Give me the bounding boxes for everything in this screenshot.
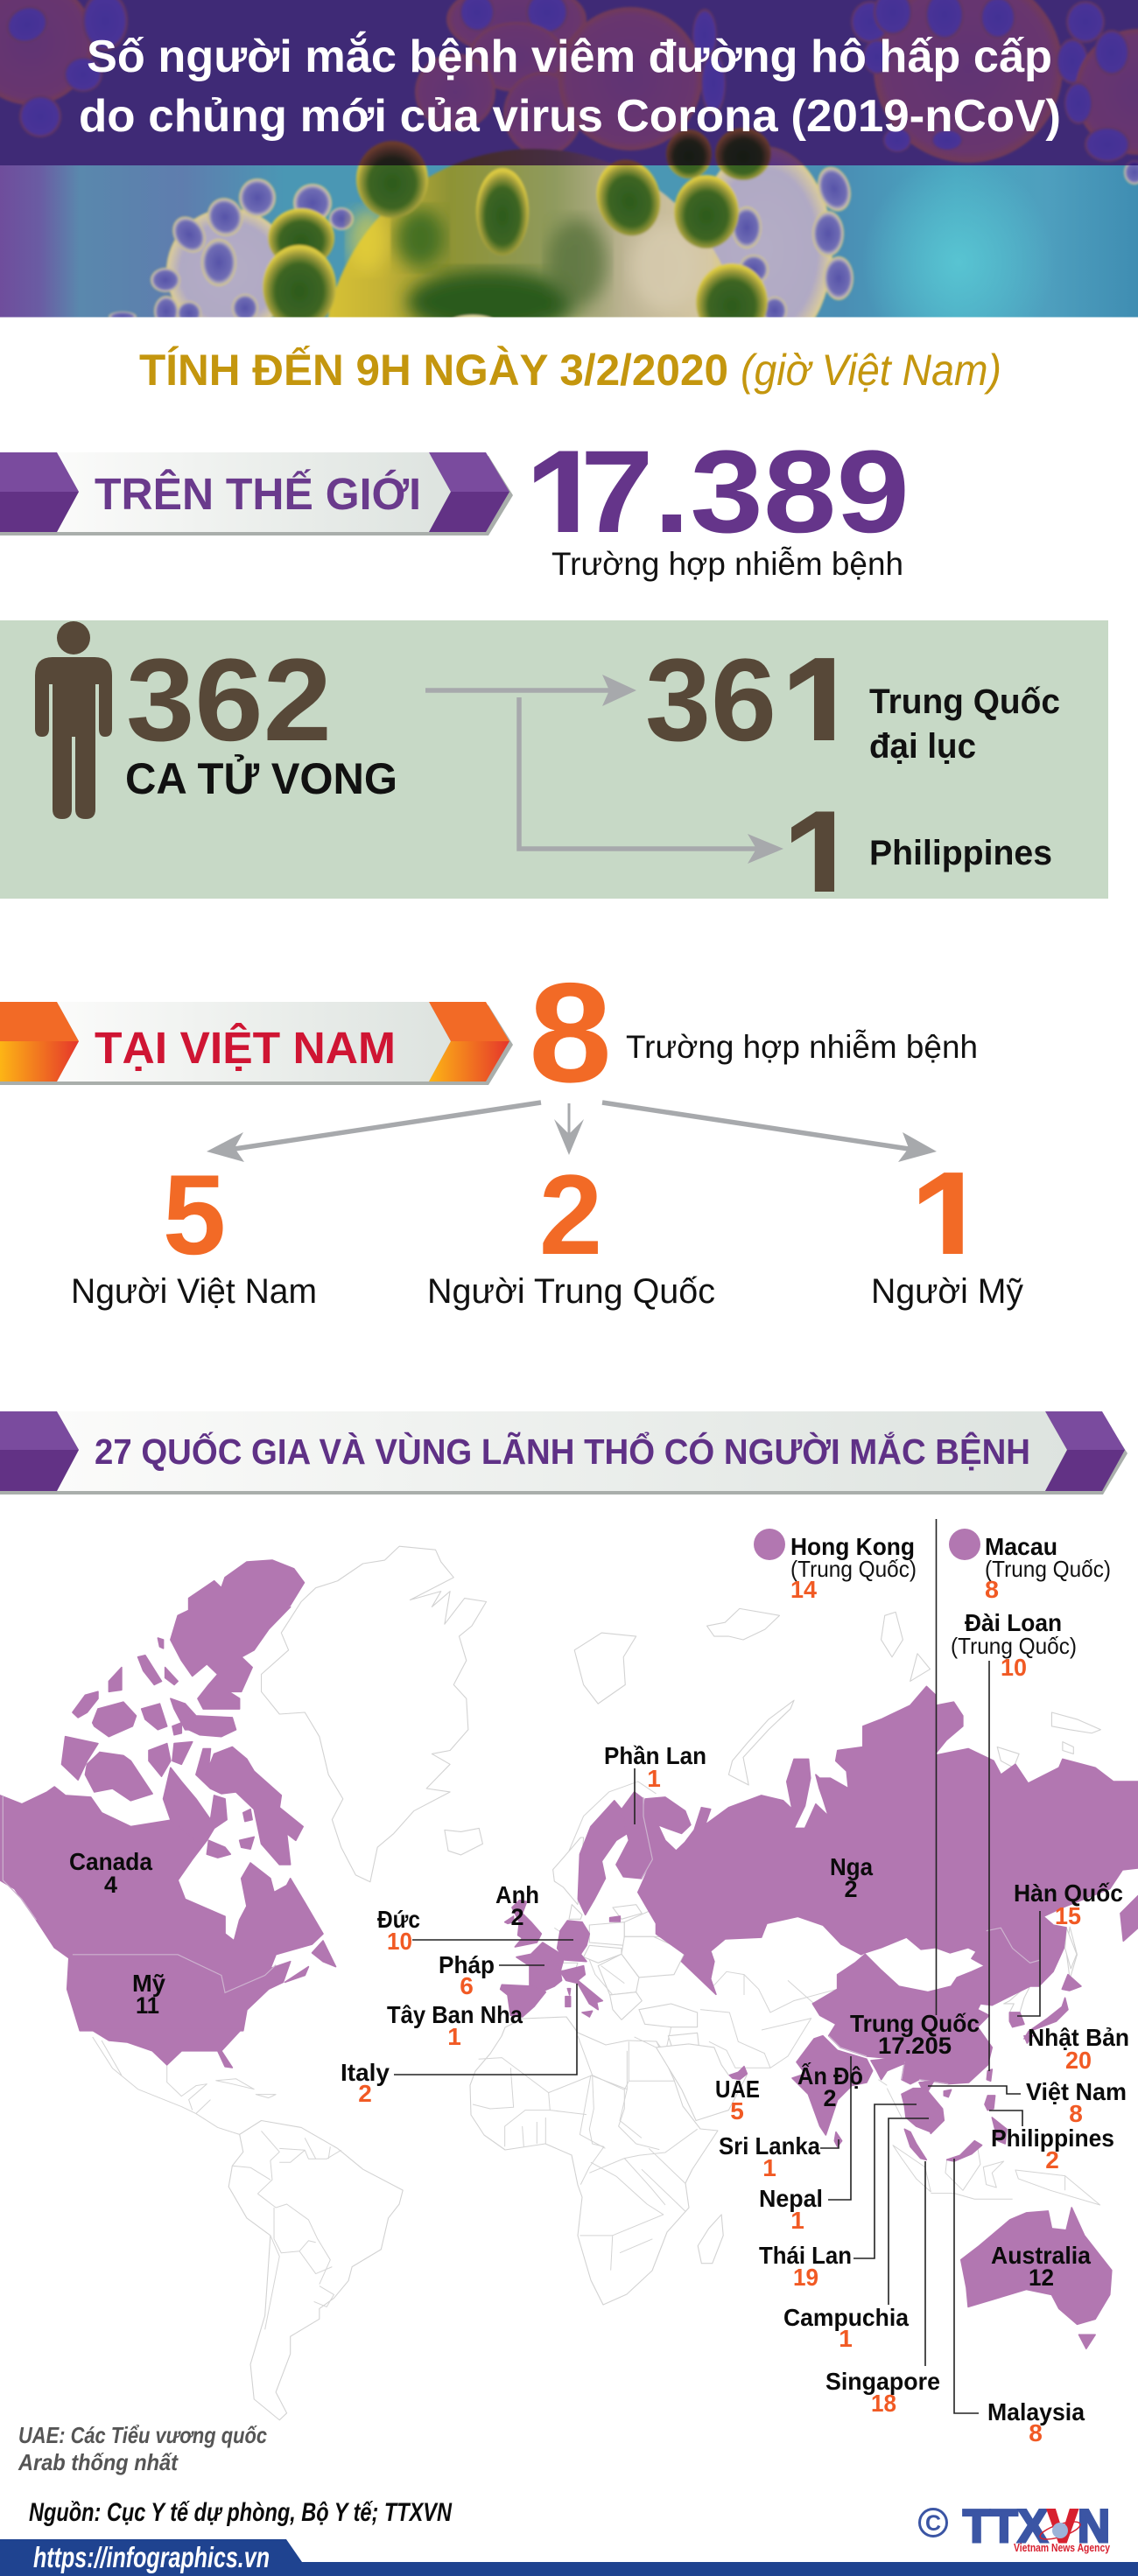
label: Pháp: Pháp [439,1951,495,1978]
label: Mỹ: 11 [136,1992,159,2019]
label: Hàn Quốc: 15 [1055,1902,1081,1929]
label: Đài Loan: Đài Loan [965,1609,1062,1636]
deaths in Philippines [782,781,1052,940]
label: Canada [69,1848,152,1898]
label: Trung Quốc [850,2010,980,2059]
logo: TTXVN [919,2501,1111,2554]
arrows to breakdown [425,675,783,864]
label: Sri Lanka: 1 [762,2154,776,2181]
label: Philippines: Philippines [991,2124,1114,2152]
label: Anh: 2 [510,1904,524,1930]
stat: American [871,1142,1023,1311]
deaths in mainland China [648,658,1059,764]
label: Tây Ban Nha [387,2001,523,2050]
banner: countries: 27 QUỐC GIA VÀ VÙNG LÃNH THỔ CÓ NGƯỜI MẮC BỆNH [95,1431,1030,1472]
back lavender virus [712,146,833,317]
label: Macau: (Trung Quốc) [985,1556,1111,1582]
title [79,31,1061,142]
label: UAE: UAE [715,2076,760,2103]
label: Đài Loan: 10 [1001,1654,1027,1681]
label: Macau: 8 [985,1576,999,1603]
top-left virus [0,0,94,105]
banner: countries [0,1411,1127,1494]
label: Hong Kong: 14 [790,1576,817,1603]
deaths total: CA TỬ VONG [125,753,397,803]
label: Macau [949,1529,1111,1603]
label: Đài Loan: (Trung Quốc) [951,1633,1077,1659]
main sphere lobes [356,141,428,218]
stat: Vietnamese: 5 [163,1151,226,1278]
label: Tây Ban Nha: Tây Ban Nha [387,2001,523,2028]
map: affected countries [0,1560,1138,2348]
label: Hong Kong: (Trung Quốc) [790,1556,917,1582]
label: Macau: Macau [985,1533,1057,1560]
stat: American: 1 [910,1142,989,1302]
label: Nhật Bản [1028,2024,1129,2074]
label: Nepal: 1 [790,2207,804,2234]
label: Trung Quốc: Trung Quốc [850,2010,980,2037]
deaths in mainland China: 36 [645,635,776,766]
Vietnam total cases: 8 [529,954,612,1112]
label: Malaysia: Malaysia [987,2398,1085,2426]
main sphere [327,148,723,317]
arrows: Vietnam breakdown [207,1102,937,1162]
world total cases: Trường hợp nhiễm bệnh [551,546,903,582]
banner: Vietnam: TẠI VIỆT NAM [95,1022,396,1073]
date line: (giờ Việt Nam) [741,346,1001,395]
note: UAE definition: Arab thống nhất [18,2449,179,2475]
top-right large virus [874,0,1063,163]
deaths total [125,635,397,803]
icon: person [35,621,112,819]
deaths in mainland China: Trung Quốc [869,682,1060,721]
band base tone [0,0,1138,165]
label: Việt Nam [1026,2078,1127,2127]
label: Anh [495,1881,539,1930]
label: Singapore: 18 [871,2390,896,2417]
Russia and Scandinavia [578,1686,1138,1994]
label: Mỹ: Mỹ [132,1970,165,1997]
title: do chủng mới của virus Corona (2019-nCoV) [79,91,1061,142]
label: Nga [830,1853,873,1902]
label: Canada: Canada [69,1848,152,1875]
label: Campuchia: Campuchia [783,2304,909,2331]
label: Italy: 2 [358,2080,372,2107]
world total cases [524,420,910,582]
label: Philippines: 2 [1045,2146,1059,2174]
label: Canada: 4 [104,1872,117,1898]
map: outlined countries [93,1546,1100,2420]
label: Malaysia: 8 [1029,2419,1043,2446]
label: Campuchia [783,2304,909,2352]
label: Việt Nam: Việt Nam [1026,2078,1127,2105]
label: Thái Lan: Thái Lan [759,2242,852,2269]
copyright mark: C [925,2511,941,2536]
North America [0,1560,336,2031]
purple title band [0,0,1138,165]
label: Trung Quốc: 17.205 [878,2033,952,2059]
copyright mark [919,2510,947,2536]
label: Nhật Bản: 20 [1065,2047,1092,2074]
label: Hàn Quốc [1014,1880,1123,1929]
stat: Vietnamese [71,1151,317,1311]
source: Nguồn: Cục Y tế dự phòng, Bộ Y tế; TTXVN [29,2498,453,2527]
deaths in Philippines: Philippines [869,834,1052,872]
footer bar [0,2539,1138,2576]
deaths in mainland China: đại lục [869,727,976,766]
date line: TÍNH ĐẾN 9H NGÀY 3/2/2020 [139,346,728,395]
label: Sri Lanka [719,2132,820,2181]
label: Philippines [991,2124,1114,2174]
date line [139,346,1001,395]
label: Tây Ban Nha: 1 [447,2023,461,2050]
label: Nga: 2 [844,1876,858,1902]
label: Italy: Italy [341,2059,390,2086]
wordmark: TTXVN [963,2501,1110,2552]
stat: Chinese [427,1151,715,1311]
world total cases: 7.389 [580,427,910,557]
label: UAE: 5 [730,2097,744,2124]
label: Italy [341,2059,390,2107]
banner: Vietnam [0,1002,513,1085]
label: Đài Loan [951,1609,1077,1681]
banner: world: TRÊN THẾ GIỚI [95,468,421,519]
label: Nhật Bản: Nhật Bản [1028,2024,1129,2051]
label: Ấn Độ [797,2062,863,2111]
wordmark: Vietnam News Agency [1014,2541,1111,2554]
label: Thái Lan: 19 [793,2264,818,2291]
header: virus photo banner [0,0,1138,317]
label: Pháp [439,1951,495,1999]
world total cases: 1 [524,420,605,581]
label: Australia: Australia [991,2242,1091,2269]
label: Đức: Đức [377,1906,420,1933]
label: Australia [991,2242,1091,2291]
label: Malaysia [987,2398,1085,2446]
label: Phần Lan: 1 [647,1765,661,1792]
label: Việt Nam: 8 [1069,2100,1083,2127]
China and Asia [729,1896,1138,2161]
label: Đức: 10 [387,1928,412,1955]
label: Ấn Độ: Ấn Độ [797,2062,863,2090]
label: Đức [377,1906,420,1955]
banner: world [0,452,513,536]
label: Campuchia: 1 [839,2325,853,2352]
stat: Vietnamese: Người Việt Nam [71,1272,317,1311]
label: Anh: Anh [495,1881,539,1908]
label: Ấn Độ: 2 [823,2085,837,2111]
label: Phần Lan [604,1742,706,1792]
far-right virus [1075,29,1138,155]
left virus [165,208,276,317]
Vietnam total cases [529,954,978,1112]
deaths total: 362 [126,635,332,766]
label: Singapore [825,2368,940,2417]
label: Hong Kong: Hong Kong [790,1533,915,1560]
title: Số người mắc bệnh viêm đường hô hấp cấp [87,31,1052,82]
label: Nga: Nga [830,1853,873,1880]
deaths in Philippines: 1 [782,781,861,940]
photo background [0,165,1138,318]
Europe [501,1900,620,2017]
note: UAE definition [18,2422,267,2475]
label: Pháp: 6 [460,1972,474,1999]
Australia [961,2208,1112,2348]
label: Phần Lan: Phần Lan [604,1742,706,1769]
label: Sri Lanka: Sri Lanka [719,2132,820,2160]
label: Hong Kong [754,1529,917,1603]
label: Australia: 12 [1029,2264,1054,2291]
label: Mỹ [132,1970,165,2019]
footer bar: https://infographics.vn [33,2541,270,2573]
deaths in mainland China: 1 [780,627,861,790]
Vietnam total cases: Trường hợp nhiễm bệnh [626,1029,978,1065]
stat: Chinese: 2 [539,1151,602,1278]
label: Hàn Quốc: Hàn Quốc [1014,1880,1123,1907]
top-centre cluster [446,0,587,47]
note: UAE definition: UAE: Các Tiểu vương quốc [18,2422,267,2448]
world map [0,1519,1138,2446]
label: Nepal: Nepal [759,2185,823,2212]
label: UAE [715,2076,760,2124]
label: Nepal [759,2185,823,2234]
viruses behind the band [0,0,1138,317]
stat: American: Người Mỹ [871,1272,1023,1311]
stat: Chinese: Người Trung Quốc [427,1272,715,1311]
panel: deaths [0,620,1108,940]
label: Thái Lan [759,2242,852,2291]
label: Singapore: Singapore [825,2368,940,2395]
callout lines [394,1519,1040,2413]
